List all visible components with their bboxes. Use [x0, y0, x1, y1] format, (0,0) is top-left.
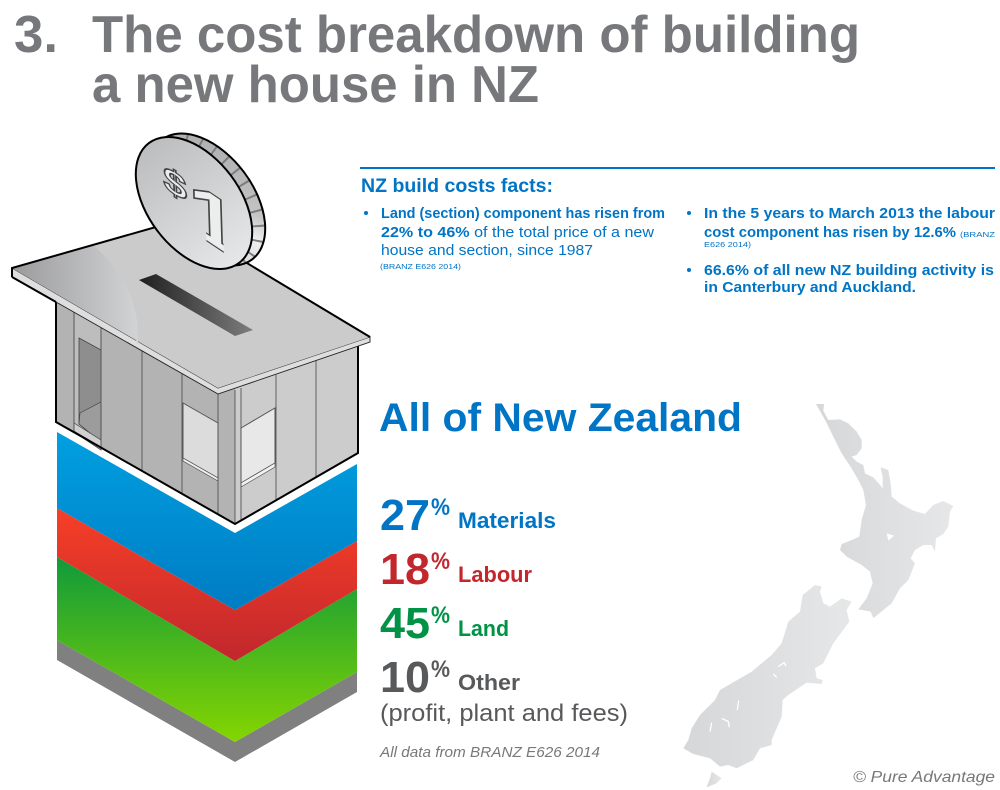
layer: labour	[57, 508, 357, 661]
heading: All of New Zealand: All of New Zealand	[379, 396, 742, 440]
source note: All data from BRANZ E626 2014	[379, 744, 600, 761]
Stewart Island	[707, 772, 722, 787]
fact: labour component: cost component has risen by 12.6%	[704, 225, 956, 241]
copyright: © Pure Advantage	[853, 769, 995, 786]
coin rim ticks	[172, 135, 264, 262]
stat: labour: %	[431, 548, 450, 575]
cost layers chart	[57, 432, 357, 762]
stat: other: %	[431, 656, 450, 683]
heading: facts: NZ build costs facts:	[361, 176, 553, 197]
stat: materials	[380, 491, 556, 540]
roof sheen	[12, 245, 138, 345]
North Island	[816, 404, 953, 618]
roof slot	[139, 274, 253, 336]
fact: land component	[364, 206, 665, 271]
fact: land component: house and section, since 1987	[381, 243, 593, 259]
left wall	[56, 298, 235, 524]
stat: labour: Labour	[458, 562, 532, 587]
coin rim	[125, 112, 289, 287]
fact: labour component: (BRANZ	[960, 230, 996, 239]
fact: land component: 22% to 46% of the total price of a new	[381, 225, 655, 241]
house outline	[56, 298, 358, 524]
stat: labour	[380, 545, 532, 594]
stat: land: 45	[380, 599, 430, 648]
stat: materials: %	[431, 494, 450, 521]
fact: building activity: in Canterbury and Auckland.	[704, 280, 916, 296]
coin label: 1	[187, 161, 240, 278]
roof top	[12, 221, 370, 388]
stat: materials: Materials	[458, 508, 556, 533]
title: The cost breakdown of building	[92, 6, 860, 64]
left window	[183, 403, 218, 478]
stat: labour: 18	[380, 545, 430, 594]
fact: labour component: In the 5 years to March 2013 the labour	[704, 206, 995, 222]
southern lakes	[710, 663, 786, 732]
layer: materials	[57, 432, 357, 610]
stat: land: %	[431, 602, 450, 629]
fact: labour component	[687, 206, 996, 249]
stat: other	[380, 653, 628, 727]
roof outline	[12, 221, 370, 337]
fact: labour component: E626 2014)	[704, 240, 752, 249]
stat: materials: 27	[380, 491, 430, 540]
coin label: $	[163, 158, 188, 210]
stat: other: 10	[380, 653, 430, 702]
panel: NZ build costs facts	[360, 167, 996, 296]
fact: land component: Land (section) component has risen from	[381, 206, 665, 222]
right wall	[235, 343, 358, 524]
stat: other: Other	[458, 670, 520, 695]
stat: other: (profit, plant and fees)	[380, 700, 628, 727]
right window	[241, 408, 275, 483]
fact: building activity	[687, 263, 994, 296]
lake Taupo	[887, 533, 894, 541]
layer: other	[57, 640, 357, 762]
house money box	[12, 221, 370, 524]
door	[74, 312, 101, 450]
stat: land: Land	[458, 616, 509, 641]
coin	[134, 132, 266, 270]
title: a new house in NZ	[92, 56, 539, 114]
layer: land	[57, 557, 357, 742]
title	[14, 6, 860, 114]
coin face	[112, 115, 276, 291]
fact: land component: (BRANZ E626 2014)	[380, 262, 462, 271]
wall panel lines	[74, 312, 316, 524]
coin label	[162, 168, 224, 253]
stat: land	[380, 599, 509, 648]
map: New Zealand	[683, 404, 953, 787]
fact: building activity: 66.6% of all new NZ building activity is	[704, 263, 994, 279]
South Island	[683, 585, 852, 768]
roof fascia	[12, 268, 370, 394]
coin rim outline	[125, 112, 289, 287]
title: 3.	[14, 6, 58, 64]
